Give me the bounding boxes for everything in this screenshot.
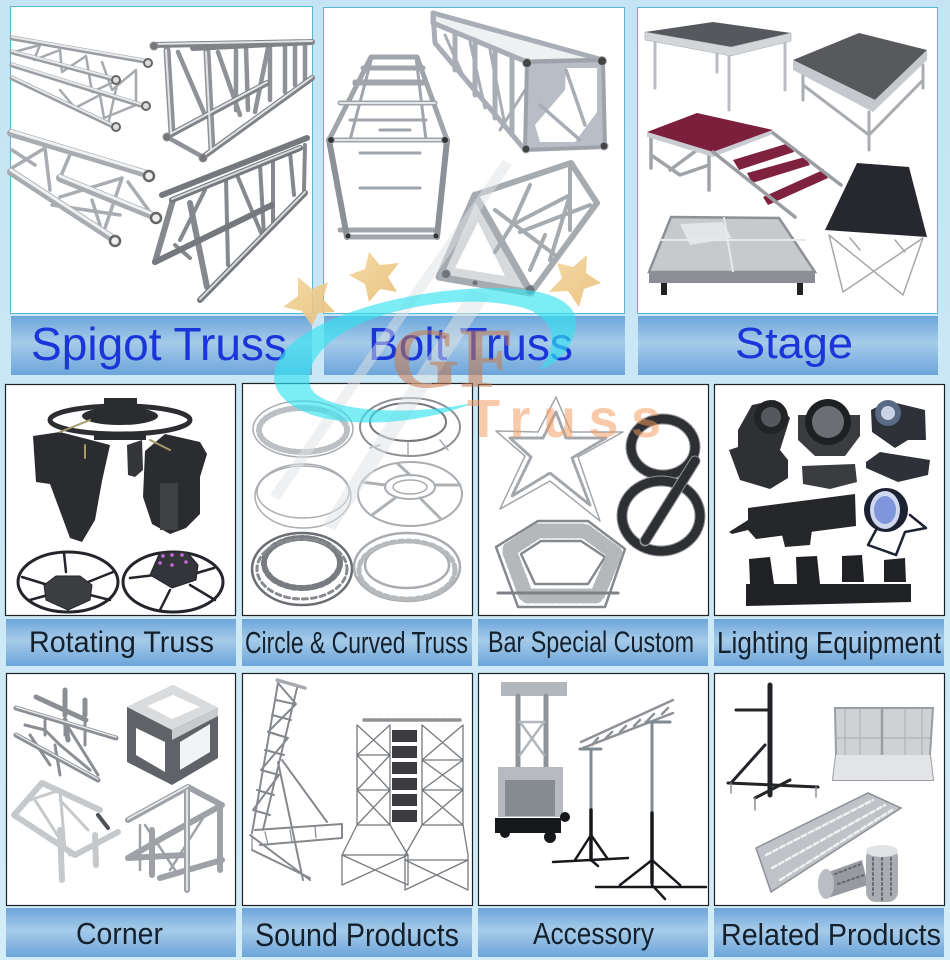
watermark: Truss letters: Truss: [467, 389, 661, 449]
panel: circle & curved truss: [242, 384, 472, 616]
label: Related Products: [714, 908, 944, 957]
label: Stage: [638, 316, 938, 375]
related: rolled decking: [818, 845, 898, 902]
panel: spigot truss: [10, 6, 312, 314]
corner: box block: [127, 685, 218, 785]
panel: stage: [638, 8, 938, 314]
watermark: GF letters: GF: [390, 310, 514, 406]
accessory: tower lift: [495, 682, 570, 843]
related: crowd barrier: [833, 708, 933, 780]
label: Corner: Corner: [76, 916, 163, 951]
label: Bar Special Custom: Bar Special Custom: [488, 626, 694, 659]
truss: open box: [328, 57, 448, 239]
corner: silver frame: [128, 786, 222, 890]
label: Bolt Truss: Bolt Truss: [368, 318, 573, 370]
stage: glass: [649, 217, 815, 295]
panel: bar special custom: [478, 384, 708, 616]
label: Spigot Truss: Spigot Truss: [31, 318, 287, 370]
label: Circle & Curved Truss: [242, 619, 472, 666]
truss: top left: [12, 37, 152, 131]
panel: lighting equipment: [714, 384, 944, 616]
panel: corner: [6, 674, 236, 906]
accessory: truss gantry: [580, 700, 673, 813]
truss: top right: [150, 41, 312, 162]
panel: bolt truss: [324, 8, 624, 314]
sound: speaker stack: [392, 730, 417, 822]
sound: leaning tower: [250, 680, 342, 880]
number 8 truss: [622, 419, 700, 551]
star truss: [496, 397, 623, 521]
panel: related products: [714, 674, 944, 906]
label: Sound Products: Sound Products: [255, 917, 459, 953]
watermark: cyan swoosh: [274, 288, 576, 423]
truss: long box: [433, 13, 608, 153]
truss: triangular: [439, 163, 597, 295]
truss: bottom right: [155, 138, 307, 300]
related: ramp: [756, 793, 901, 892]
light: wash head: [729, 400, 790, 489]
light: par can: [864, 488, 926, 555]
label: Sound Products: [242, 908, 472, 957]
ring: with hub: [123, 552, 223, 612]
stage: dark top right: [793, 33, 927, 150]
label: Rotating Truss: Rotating Truss: [29, 626, 214, 659]
label: Circle & Curved Truss: Circle & Curved Truss: [245, 625, 468, 660]
circle trusses: [252, 398, 462, 605]
corner: cross truss: [16, 690, 116, 780]
light: LED bar: [746, 555, 911, 606]
label: Rotating Truss: [6, 619, 236, 666]
accessory: crank stand legs: [553, 810, 706, 899]
panel: sound products: [242, 674, 472, 906]
label: Corner: [6, 908, 236, 957]
watermark: GF Truss logo: [270, 160, 661, 530]
corner: white tri: [14, 783, 118, 880]
moving heads on ring: [33, 398, 207, 542]
label: Accessory: [478, 908, 708, 957]
panel: rotating truss: [6, 384, 236, 616]
light: beam head: [798, 399, 860, 489]
ring: plain: [18, 552, 118, 612]
related: lift stand: [728, 685, 818, 810]
stage: black folding: [825, 163, 927, 295]
label: Bolt Truss: [324, 316, 625, 375]
stage: red steps: [647, 113, 841, 217]
label: Accessory: Accessory: [533, 916, 654, 951]
truss: bottom left: [11, 131, 161, 246]
panel: accessory: [478, 674, 708, 906]
hexagon truss: [496, 521, 625, 607]
light: spot head: [866, 400, 930, 482]
watermark: stars: [283, 252, 601, 326]
label: Bar Special Custom: [478, 619, 708, 666]
light: follow spot: [729, 494, 856, 547]
watermark: white diagonal bands: [270, 160, 512, 530]
sound: scaffold tower: [342, 720, 468, 890]
stage: grey top: [645, 22, 791, 110]
label: Stage: Stage: [735, 319, 853, 368]
